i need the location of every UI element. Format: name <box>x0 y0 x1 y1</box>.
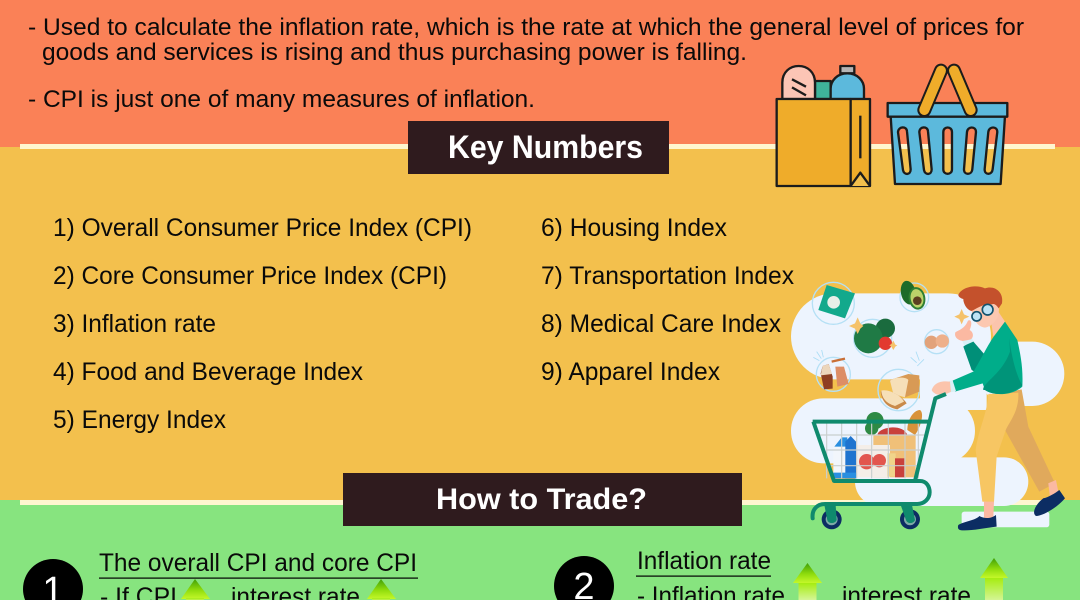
neck <box>992 312 1005 337</box>
text: definition bullets: - Used to calculate the inflation rate, which is the rate at which the general level of prices for <box>28 14 1024 41</box>
list: key numbers right column: 8) Medical Care Index <box>541 310 781 338</box>
rear arm <box>963 340 985 375</box>
list: key numbers left column: 5) Energy Index <box>53 406 226 434</box>
heading: key numbers <box>408 121 669 174</box>
cart contents <box>833 410 922 478</box>
list: key numbers left column: 2) Core Consumer Price Index (CPI) <box>53 262 447 290</box>
panel: key numbers (yellow) <box>0 121 1080 500</box>
list: key numbers left column <box>53 214 472 434</box>
hands <box>932 381 951 395</box>
bubble: package <box>812 282 855 324</box>
panel: definition (orange) <box>0 0 1080 147</box>
icon: up arrow inflation <box>793 563 822 600</box>
list: key numbers right column: 6) Housing Index <box>541 214 727 242</box>
torso and front arm <box>952 322 1023 394</box>
panel: how to trade (green) <box>0 473 1080 600</box>
heading: how to trade: How to Trade? <box>436 483 647 516</box>
heading: key numbers: Key Numbers <box>448 129 643 165</box>
bubble: condiments <box>813 350 850 391</box>
icon: grocery bag <box>777 66 870 186</box>
food bubbles <box>812 279 949 411</box>
bubble: eggs <box>925 330 949 354</box>
icon: up arrow interest rate <box>367 579 396 600</box>
bubble: greens <box>849 317 897 357</box>
step 2: inflation rate <box>554 547 1008 600</box>
cart frame <box>813 394 946 518</box>
list: key numbers right column <box>541 214 794 386</box>
illustration: shopper with cart <box>791 279 1065 530</box>
hair <box>958 286 1002 311</box>
background blobs <box>791 293 1064 527</box>
step 1 rule text <box>100 583 360 600</box>
face <box>972 303 999 328</box>
text: definition bullets <box>28 14 1024 113</box>
step 2 heading: Inflation rate <box>637 547 771 575</box>
icon: up arrow CPI <box>181 579 210 600</box>
list: key numbers right column: 9) Apparel Index <box>541 358 720 386</box>
step 1: overall CPI and core CPI <box>23 549 418 600</box>
step 2 rule text <box>637 582 971 600</box>
cart wheels <box>822 505 920 529</box>
sweater shadow <box>983 338 1022 394</box>
text: definition bullets: goods and services is rising and thus purchasing power is falling. <box>42 39 747 66</box>
cuffs <box>949 380 956 392</box>
text: definition bullets: - CPI is just one of many measures of inflation. <box>28 86 535 113</box>
icon: shopping basket <box>888 71 1007 184</box>
bubble: bread <box>878 352 924 411</box>
heading: how to trade <box>343 473 742 526</box>
list: key numbers left column: 4) Food and Beverage Index <box>53 358 363 386</box>
ankles <box>984 502 994 519</box>
trousers <box>1000 389 1055 492</box>
badge: number 1 <box>23 559 83 600</box>
step 1 heading: The overall CPI and core CPI <box>99 549 417 577</box>
icon: up arrow interest <box>980 558 1008 600</box>
list: key numbers left column: 1) Overall Consumer Price Index (CPI) <box>53 214 472 242</box>
sparkle <box>954 309 969 324</box>
bubble: avocado <box>899 279 929 312</box>
badge: number 2 <box>554 556 614 600</box>
shoes <box>958 515 997 530</box>
list: key numbers right column: 7) Transportation Index <box>541 262 794 290</box>
list: key numbers left column: 3) Inflation rate <box>53 310 216 338</box>
shopper <box>932 286 1065 530</box>
glasses <box>972 304 993 321</box>
